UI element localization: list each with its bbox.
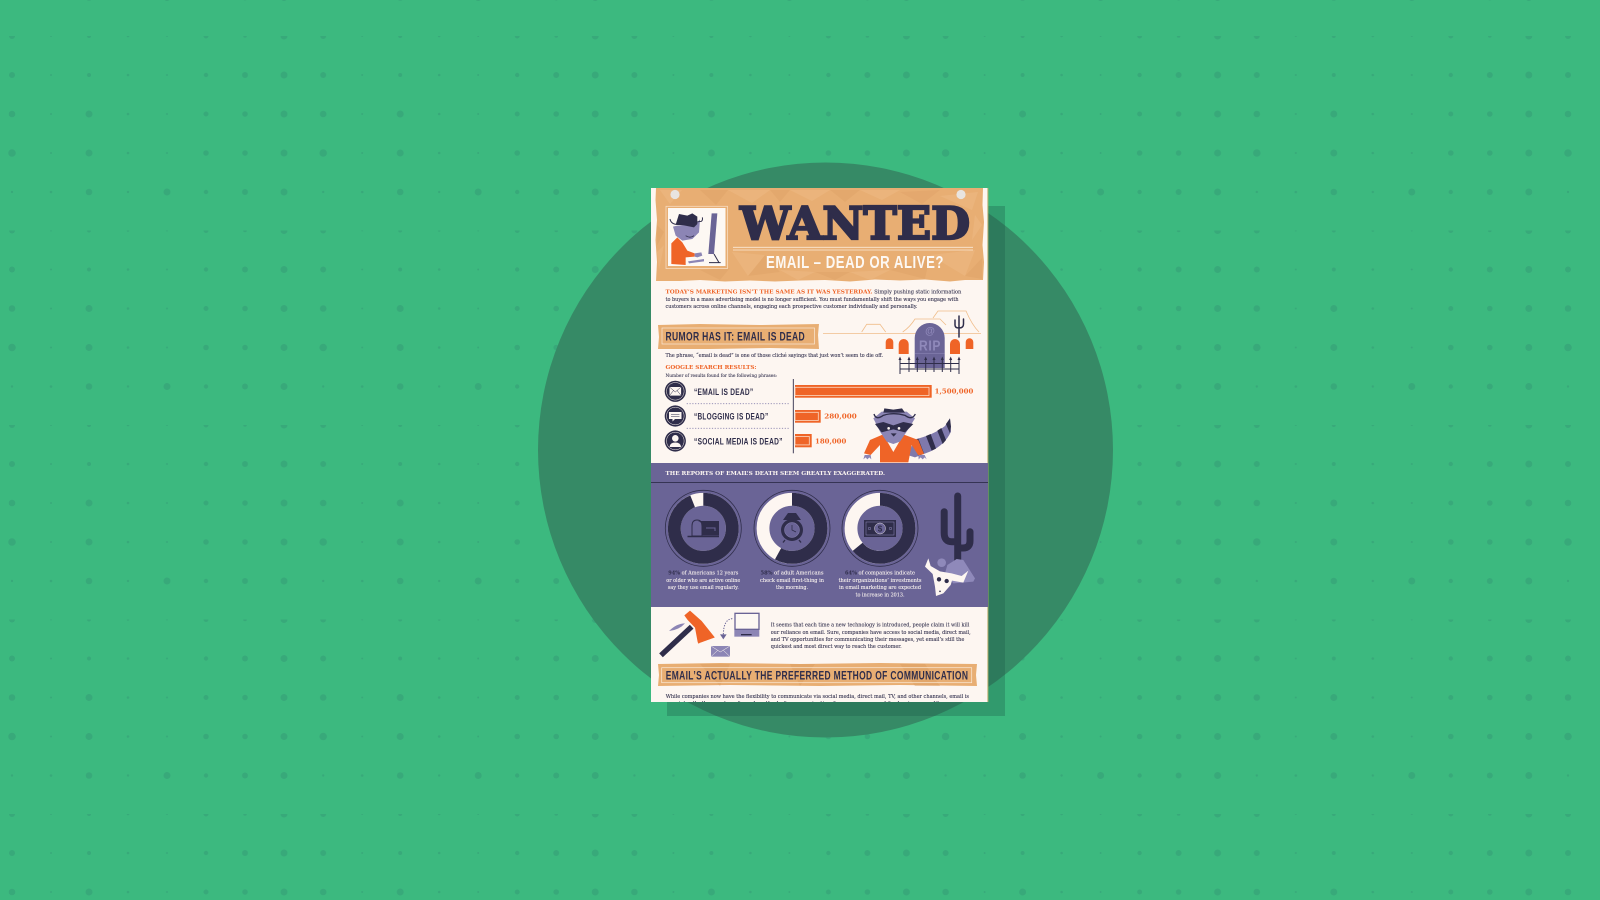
- row labels: [694, 387, 783, 447]
- poster drop shadow: [667, 206, 1005, 716]
- wanted header banner: [656, 188, 984, 282]
- intro text: to buyers in a mass advertising model is no longer sufficient. You must fundamentally shift the ways you engage with: [666, 297, 959, 303]
- intro text: TODAY’S MARKETING ISN’T THE SAME AS IT WAS YESTERDAY.: [666, 290, 873, 296]
- panel: exaggerated reports: [651, 463, 988, 607]
- body text: new technology: [771, 622, 971, 650]
- icon: alarm clock: [781, 513, 803, 542]
- stat caption: 64%: 64% of companies indicate: [845, 570, 915, 576]
- graveyard illustration: [823, 311, 981, 374]
- portrait of cat at computer: [666, 206, 728, 268]
- bar values: 280,000: [824, 412, 857, 420]
- heading band: preferred method: [658, 663, 977, 686]
- axe: [661, 611, 715, 655]
- icon: envelope: [711, 646, 730, 657]
- wanted poster: [651, 188, 988, 707]
- bar values: 1,500,000: [935, 388, 974, 396]
- row labels: “EMAIL IS DEAD”: [694, 387, 754, 398]
- pins: [670, 190, 966, 199]
- bar: blogging is dead: [795, 410, 821, 423]
- axe and devices illustration: [661, 611, 759, 657]
- title: WANTED: WANTED: [739, 197, 970, 250]
- body text: new technology: our reliance on email. Sure, companies have access to social media, direct mail,: [771, 630, 971, 636]
- tombstone: RIP: [919, 337, 941, 354]
- stat caption: 64%: [838, 570, 922, 598]
- stat caption: 94%: [666, 570, 740, 591]
- donut: 94%: [665, 490, 741, 566]
- stat caption: 58%: the morning.: [776, 585, 808, 591]
- heading band: rumor has it: RUMOR HAS IT: EMAIL IS DEAD: [666, 329, 805, 343]
- title rules: [733, 247, 973, 250]
- stat caption: 64%: their organizations’ investments: [838, 578, 922, 584]
- cactus and skull: [925, 496, 975, 596]
- dashed arrow: [720, 619, 732, 639]
- raccoon outlaw: [863, 408, 951, 462]
- fence: [898, 356, 960, 374]
- donut: 64%: [842, 490, 918, 566]
- stat caption: 58%: 58% of adult Americans: [760, 570, 824, 576]
- tail: [907, 418, 951, 457]
- stat caption: 58%: [760, 570, 825, 591]
- row labels: “BLOGGING IS DEAD”: [694, 412, 768, 422]
- icon: mailbox: [688, 520, 719, 536]
- intro text: Simply pushing static information: [874, 290, 962, 296]
- google search text: Number of results found for the following phrases:: [666, 373, 777, 379]
- intro text: [666, 290, 962, 310]
- body text: new technology: It seems that each time a new technology is introduced, people claim it will kill: [771, 622, 970, 628]
- stat caption: 94%: or older who are active online: [666, 578, 740, 584]
- body text: new technology: quickest and most direct way to reach the customer.: [771, 644, 902, 650]
- icon: banknote: [864, 520, 896, 537]
- bar: email is dead: [795, 385, 932, 398]
- stat caption: 58%: check email first-thing in: [760, 578, 825, 584]
- desert horizon: [823, 311, 981, 334]
- section heading: THE REPORTS OF EMAIL’S DEATH SEEM GREATLY EXAGGERATED.: [666, 471, 885, 477]
- heading band: preferred method: EMAIL’S ACTUALLY THE PREFERRED METHOD OF COMMUNICATION: [666, 670, 968, 682]
- tombstone: [915, 323, 945, 368]
- body text: preferred method (cut off by poster edge): consistently the most preferred method of communication for consumers and for businesses alike.: [666, 701, 946, 707]
- heading band: rumor has it: [658, 324, 819, 349]
- google search text: The phrase, “email is dead” is one of those cliché sayings that just won’t seem to die off.: [666, 352, 883, 359]
- row labels: “SOCIAL MEDIA IS DEAD”: [694, 436, 783, 447]
- body text: preferred method (cut off by poster edge): While companies now have the flexibility to communicate via social media, direct mail, TV, and other channels, email is: [666, 694, 969, 700]
- stat caption: 94%: 94% of Americans 12 years: [668, 570, 739, 576]
- subtitle: EMAIL – DEAD OR ALIVE?: [766, 252, 944, 272]
- icon: speech bubble: [665, 405, 686, 427]
- orange grave markers: [886, 338, 973, 354]
- google search text: [666, 352, 883, 379]
- bar values: [815, 388, 974, 445]
- icon: laptop: [734, 613, 759, 637]
- stat caption: 64%: in email marketing are expected: [839, 585, 922, 591]
- small cactus: [955, 316, 964, 337]
- body text: new technology: and TV opportunities for communicating their messages, yet email’s still the: [771, 637, 964, 643]
- icon: person: [665, 430, 686, 452]
- icon: envelope: [665, 381, 686, 402]
- bar values: 180,000: [815, 437, 847, 445]
- background circle: [538, 162, 1113, 738]
- icon: banknote: $: [878, 524, 883, 533]
- google search text: GOOGLE SEARCH RESULTS:: [666, 365, 756, 371]
- tombstone: @: [925, 326, 935, 337]
- donut: 58%: [754, 490, 830, 566]
- stat caption: 94%: say they use email regularly.: [668, 585, 739, 591]
- bar: social media is dead: [795, 434, 812, 447]
- stat caption: 64%: to increase in 2013.: [856, 592, 905, 598]
- intro text: customers across online channels, engaging each prospective customer individually and personally.: [666, 304, 918, 310]
- bar chart: search results: [665, 379, 974, 453]
